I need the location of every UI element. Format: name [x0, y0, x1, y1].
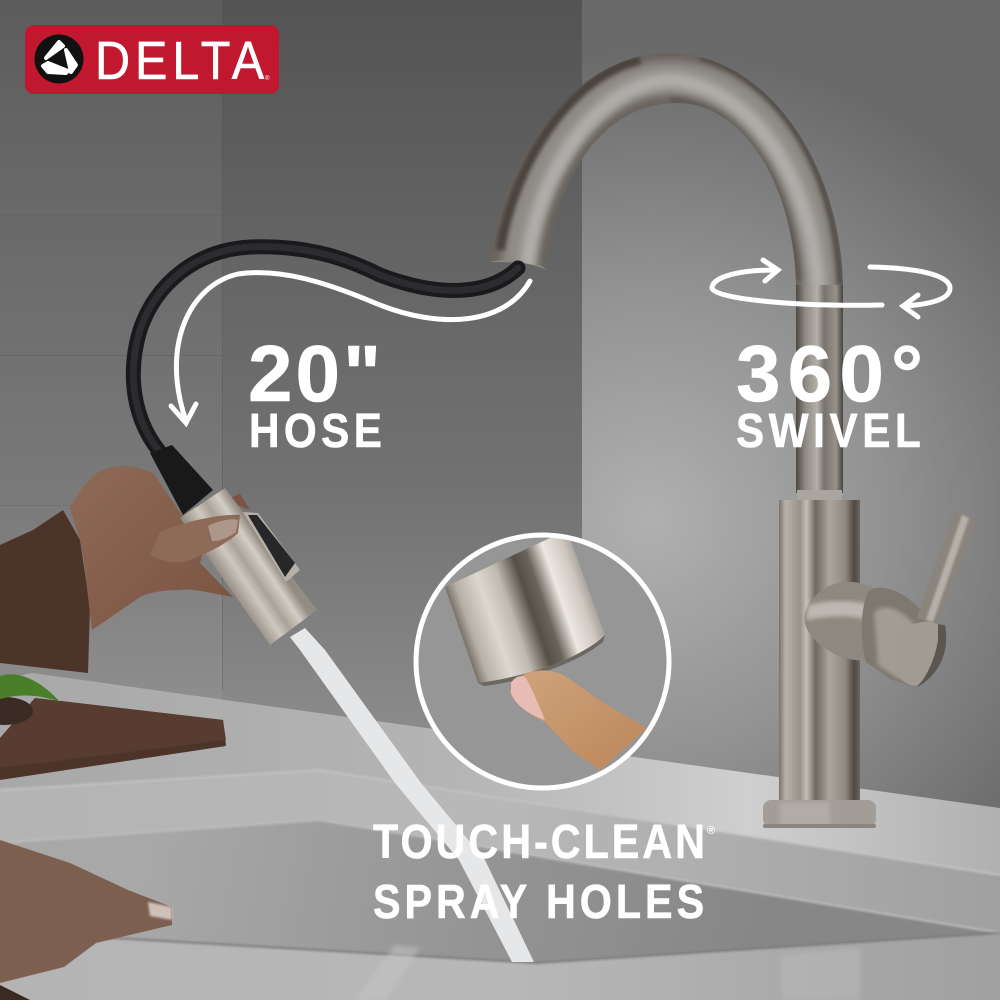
finger [510, 670, 647, 770]
cutting board and plant [0, 674, 226, 780]
caption: touch-clean spray holes: SPRAY HOLES [373, 875, 704, 929]
callout: 20 inch hose [171, 273, 530, 458]
icon: Delta triangle mark [34, 34, 84, 84]
hand holding sprayer [70, 466, 250, 630]
spray head close-up [445, 530, 605, 683]
faucet base [763, 800, 876, 828]
caption: touch-clean spray holes: TOUCH-CLEAN [373, 815, 705, 869]
faucet spout [492, 53, 843, 285]
caption: touch-clean spray holes: ® [707, 825, 715, 837]
countertop and sink [0, 673, 1000, 1000]
callout: 20 inch hose: 20" [248, 329, 381, 418]
sleeve [0, 510, 90, 673]
hose [133, 247, 518, 458]
callout: 360 degree swivel [712, 260, 950, 458]
faucet handle [804, 512, 976, 687]
caption: touch-clean spray holes [373, 815, 715, 929]
callout: 20 inch hose: HOSE [249, 403, 382, 458]
faucet neck [796, 285, 843, 493]
lower hand [0, 840, 172, 983]
sprayer wand [150, 445, 317, 645]
inset circle: touch-clean spray holes [416, 530, 669, 788]
faucet [480, 40, 976, 828]
arrow: hose curve [171, 273, 530, 423]
logo: Delta badge [25, 25, 279, 94]
callout: 360 degree swivel: SWIVEL [736, 403, 921, 458]
arrows: rotation [712, 260, 950, 317]
logo: Delta badge: DELTA [95, 30, 265, 91]
water stream [290, 628, 534, 962]
faucet body [779, 500, 860, 805]
logo: Delta badge: ® [265, 75, 270, 82]
callout: 360 degree swivel: 360° [736, 329, 923, 418]
thumb [150, 515, 240, 563]
